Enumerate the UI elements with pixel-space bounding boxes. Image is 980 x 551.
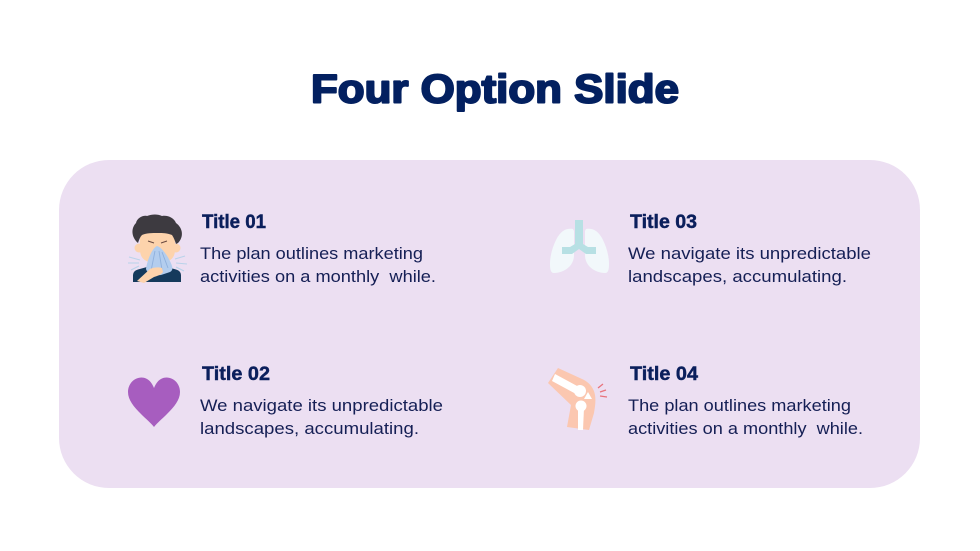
title: Four Option Slide: [311, 68, 679, 112]
heading: title 03: Title 03: [630, 211, 697, 233]
text: description 03: We navigate its unpredictable: [628, 244, 871, 263]
text: description 02: [200, 396, 443, 438]
option 02: [128, 363, 443, 438]
text: description 04: [628, 396, 863, 438]
text: description 02: landscapes, accumulating.: [200, 419, 419, 438]
text: description 03: [628, 244, 871, 286]
heading: title 01: Title 01: [202, 211, 266, 233]
text: description 01: The plan outlines marketing: [200, 244, 423, 263]
icon: lungs: [550, 220, 609, 273]
text: description 01: [200, 244, 436, 286]
heading: title 02: Title 02: [202, 363, 270, 385]
option 04: [548, 363, 863, 438]
icon: knee joint: [548, 368, 607, 430]
text: description 03: landscapes, accumulating.: [628, 267, 847, 286]
icon: sneezing person: [128, 214, 187, 283]
text: description 01: activities on a monthly while.: [200, 267, 436, 286]
icon: purple heart: [128, 378, 180, 427]
text: description 04: activities on a monthly while.: [628, 419, 863, 438]
option 03: [550, 211, 871, 286]
panel: options background: [59, 160, 920, 488]
text: description 04: The plan outlines marketing: [628, 396, 851, 415]
option 01: [128, 211, 436, 286]
text: description 02: We navigate its unpredictable: [200, 396, 443, 415]
heading: title 04: Title 04: [630, 363, 698, 385]
